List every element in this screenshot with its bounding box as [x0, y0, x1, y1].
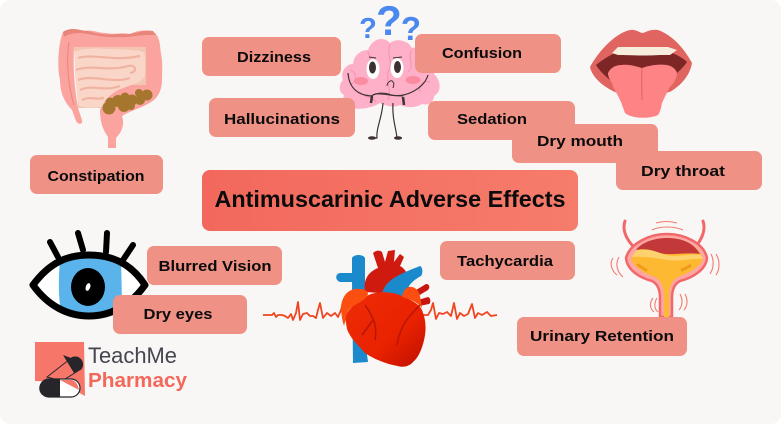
- label: Constipation: Constipation: [48, 168, 144, 185]
- label: Urinary Retention: Urinary Retention: [530, 328, 674, 345]
- label: Dry mouth: Dry mouth: [537, 133, 623, 150]
- title: [202, 170, 578, 231]
- label: Dry throat: [616, 151, 762, 190]
- label: Hallucinations: [209, 98, 355, 137]
- title: Antimuscarinic Adverse Effects: [214, 186, 566, 212]
- label: Blurred Vision: Blurred Vision: [158, 258, 272, 275]
- label: Blurred Vision: [147, 246, 282, 285]
- icon: intestines: [58, 29, 162, 148]
- aortic arch: [365, 250, 409, 295]
- icon: bladder: [611, 221, 719, 317]
- label: Dizziness: Dizziness: [237, 49, 311, 66]
- icon: mouth and tongue: [590, 30, 692, 118]
- question marks: ?: [359, 13, 377, 45]
- blue vessels: [336, 255, 368, 363]
- logo: TeachMe Pharmacy: [35, 342, 188, 397]
- icon: eye: [33, 233, 145, 316]
- label: Confusion: Confusion: [442, 45, 522, 62]
- logo: TeachMe Pharmacy: Pharmacy: [88, 370, 188, 392]
- icon: heart with ECG: [263, 250, 497, 367]
- label: Urinary Retention: [517, 317, 687, 356]
- label: Dry mouth: [512, 124, 658, 163]
- heart body: [345, 292, 426, 367]
- brand name: TeachMe: [88, 343, 177, 368]
- label: Constipation: [30, 155, 163, 194]
- label: Sedation: [428, 101, 575, 140]
- label: Confusion: [415, 34, 561, 73]
- icon: confused brain: [340, 0, 440, 140]
- question marks: [359, 0, 421, 47]
- label: Hallucinations: Hallucinations: [224, 111, 340, 128]
- label: Dry throat: Dry throat: [641, 163, 725, 180]
- label: Sedation: Sedation: [457, 111, 527, 128]
- ECG trace: [263, 302, 497, 320]
- label: Tachycardia: [440, 241, 575, 280]
- label: Dry eyes: [113, 295, 247, 334]
- question marks: ?: [401, 10, 421, 47]
- label: Dry eyes: Dry eyes: [144, 306, 212, 323]
- icon: pills: [35, 342, 85, 397]
- label: Dizziness: [202, 37, 341, 76]
- stool: [102, 89, 152, 114]
- label: Tachycardia: Tachycardia: [457, 253, 554, 270]
